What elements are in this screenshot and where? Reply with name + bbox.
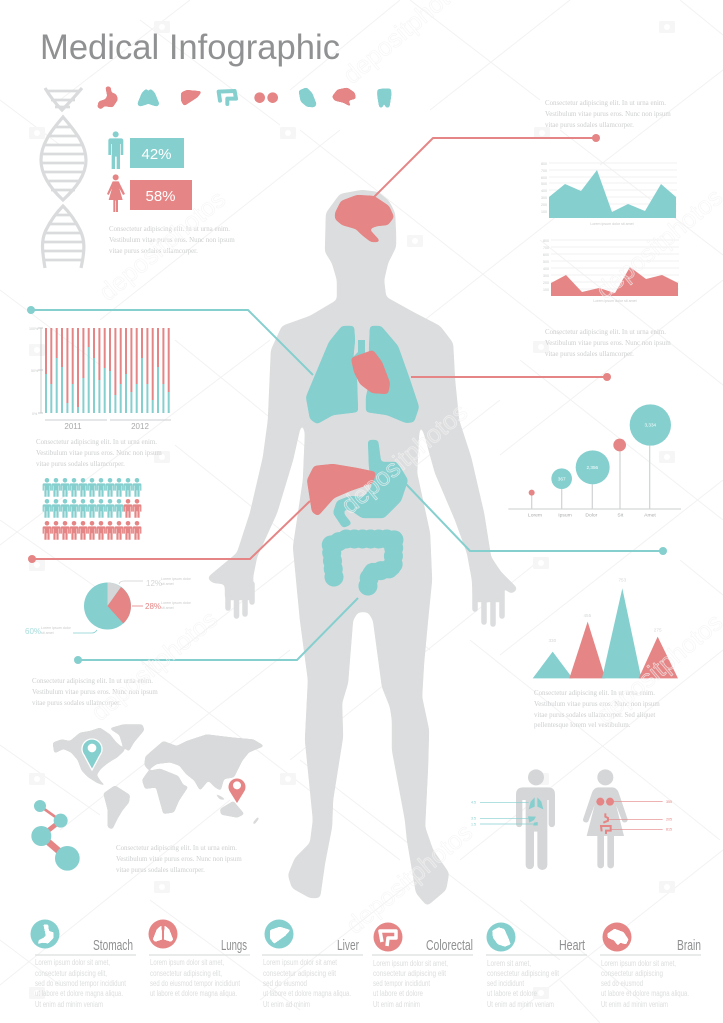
area chart: teal: 800: [541, 162, 547, 166]
leader: stomach: [405, 483, 667, 555]
section: liver: [262, 920, 363, 1009]
copy: colorectal: Ut enim ad minim: [373, 1000, 420, 1009]
copy: lungs: Lorem ipsum dolor sit amet,: [150, 958, 224, 967]
section: lungs: [148, 920, 250, 998]
title: Medical Infographic: [40, 28, 340, 67]
label: heart: Heart: [559, 937, 586, 954]
copy: heart: ut labore et dolore: [487, 989, 537, 998]
watermark text: depositphotos: [336, 398, 473, 520]
pie chart: Lorem ipsum dolor: [161, 577, 192, 581]
icon: colon: [219, 91, 236, 104]
icon: woman: [107, 174, 125, 212]
bubble chart: 367: [558, 476, 566, 481]
pictogram grid of people: [43, 478, 141, 540]
area chart: teal: 300: [541, 196, 547, 200]
copy: lungs: ut labore et dolore magna aliqua.: [150, 989, 237, 998]
label: colorectal: Colorectal: [426, 937, 473, 954]
leader: brain: [373, 134, 600, 198]
text block: top right: vitae purus sodales ullamcorper.: [545, 122, 634, 129]
female anatomy figure: 815: [666, 828, 672, 832]
icon: DNA helix: [41, 88, 86, 268]
bubble chart: Dolor: [585, 513, 598, 519]
copy: liver: sed do eiusmod: [263, 979, 307, 988]
bubble chart: Amet: [644, 513, 656, 519]
area chart: teal: 700: [541, 169, 547, 173]
copy: brain: sed do eiusmod: [601, 979, 643, 988]
icon: heart: [299, 87, 317, 107]
text block: above map: vitae purus sodales ullamcorper.: [32, 700, 121, 707]
copy: brain: Ut enim ad minim veniam: [601, 1000, 668, 1009]
male statistic: 42%: [141, 146, 172, 163]
male anatomy figure: [471, 769, 555, 870]
leader: lungs: [27, 306, 313, 375]
map pin: teal: [82, 739, 102, 770]
pie chart: sit amet: [161, 582, 174, 586]
area chart: red: [543, 239, 679, 303]
icon: heart badge: [486, 922, 516, 952]
copy: liver: consectetur adipiscing elit: [263, 969, 337, 978]
text block: middle right: vitae purus sodales ullamcorper.: [545, 351, 634, 358]
male statistic: [108, 131, 184, 169]
icon: liver: [181, 90, 202, 106]
female statistic: 58%: [145, 188, 176, 205]
area chart: teal: Lorem ipsum dolor sit amet: [590, 222, 634, 226]
pie chart: Lorem ipsum dolor: [161, 601, 192, 605]
organ: stomach: [333, 440, 408, 528]
area chart: red: Lorem ipsum dolor sit amet: [593, 299, 637, 303]
copy: stomach: Ut enim ad minim veniam: [35, 1000, 103, 1009]
triangle chart: [533, 578, 678, 678]
pie chart: Lorem ipsum dolor: [41, 626, 72, 630]
area chart: red: 200: [543, 281, 549, 285]
section: colorectal: [372, 922, 473, 1009]
bubble chart: 2,356: [587, 465, 599, 470]
world map: [53, 724, 264, 829]
copy: stomach: sed do eiusmod tempor incididunt: [35, 979, 127, 988]
icon: stomach badge: [30, 920, 60, 948]
text block: middle right: Vestibulum vitae purus eros. Nunc non ipsum: [545, 340, 671, 347]
bubble chart: Ipsum: [558, 513, 572, 519]
organ: colon: [331, 539, 394, 592]
section: brain: [600, 922, 701, 1009]
icon: brain badge: [602, 922, 632, 952]
icon: brain: [332, 88, 356, 107]
copy: heart: Ut enim ad minim veniam: [487, 1000, 554, 1009]
text block: left middle: Consectetur adipiscing elit. In ut urna enim.: [36, 439, 157, 446]
copy: stomach: ut labore et dolore magna aliqua.: [35, 989, 123, 998]
label: liver: Liver: [337, 937, 359, 954]
area chart: teal: 100: [541, 210, 547, 214]
triangle chart: 275: [654, 627, 662, 632]
icon: colon badge: [374, 922, 402, 952]
bar: 58%: [130, 180, 192, 210]
organ: heart: [351, 350, 390, 394]
male anatomy figure: 3.5: [471, 817, 476, 821]
map pin: red: [228, 778, 246, 804]
copy: heart: consectetur adipiscing elit: [487, 969, 560, 978]
female anatomy figure: 355: [666, 800, 672, 804]
area chart: red: 400: [543, 267, 549, 271]
area chart: teal: 500: [541, 182, 547, 186]
text block: middle right: Consectetur adipiscing elit. In ut urna enim.: [545, 329, 666, 336]
icon: liver badge: [264, 920, 294, 948]
leader: liver: [28, 501, 310, 563]
human body silhouette: [207, 190, 518, 906]
stacked bar chart: 0%: [32, 412, 38, 416]
text block: gender: Consectetur adipiscing elit. In ut urna enim.: [109, 226, 230, 233]
copy: liver: Ut enim ad minim: [263, 1000, 310, 1009]
triangle chart: 330: [548, 638, 557, 643]
text block: above map: Vestibulum vitae purus eros. Nunc non ipsum: [32, 689, 158, 696]
pie chart: 12%: [146, 579, 162, 588]
copy: stomach: Lorem ipsum dolor sit amet,: [35, 958, 110, 967]
male anatomy figure: 4.5: [471, 801, 476, 805]
area chart: teal: 600: [541, 176, 547, 180]
male anatomy figure: 1.5: [471, 822, 476, 826]
text block: left middle: Vestibulum vitae purus eros. Nunc non ipsum: [36, 450, 162, 457]
copy: brain: Lorem ipsum dolor sit amet,: [601, 959, 676, 968]
text block: bottom right: Vestibulum vitae purus eros. Nunc non ipsum: [534, 701, 660, 708]
organ: brain: [335, 195, 394, 242]
section: stomach: [30, 920, 136, 1009]
text block: below map: Consectetur adipiscing elit. In ut urna enim.: [116, 845, 237, 852]
copy: liver: Lorem ipsum dolor sit amet: [263, 958, 338, 967]
female anatomy figure: [583, 769, 672, 868]
text block: gender: Vestibulum vitae purus eros. Nunc non ipsum: [109, 237, 235, 244]
pie chart: 28%: [145, 602, 161, 611]
stacked bar chart: 2012: [131, 422, 149, 431]
text block: top right: Consectetur adipiscing elit. In ut urna enim.: [545, 100, 666, 107]
copy: heart: Lorem sit amet,: [487, 959, 531, 968]
icon row: organs: [97, 87, 391, 109]
copy: stomach: consectetur adipiscing elit,: [35, 969, 107, 978]
bubble chart: Sit: [617, 513, 624, 519]
pie chart: 60%: [25, 627, 41, 636]
leader lines and organs: [27, 134, 667, 664]
stacked bar chart: 50%: [31, 369, 39, 373]
stacked bar chart: 2011: [64, 422, 82, 431]
text block: above map: Consectetur adipiscing elit. In ut urna enim.: [32, 678, 153, 685]
area chart: red: 700: [543, 246, 549, 250]
text block: top right: Vestibulum vitae purus eros. Nunc non ipsum: [545, 111, 671, 118]
leader: colon: [74, 598, 358, 664]
bubble chart: [508, 404, 681, 519]
area chart: teal: 400: [541, 189, 547, 193]
bubble chart: 3,334: [645, 423, 657, 428]
text block: bottom right: vitae purus sodales ullamcorper. Sed aliquet: [534, 712, 655, 719]
pie chart: [25, 577, 192, 636]
text block: gender: vitae purus sodales ullamcorper.: [109, 248, 198, 255]
bubble chart: Lorem: [528, 513, 542, 519]
copy: colorectal: consectetur adipiscing elit: [373, 969, 447, 978]
pie chart: sit amet: [41, 631, 54, 635]
watermark text: depositphotos: [341, 818, 478, 940]
icon: man: [108, 131, 123, 169]
copy: liver: ut labore et dolore magna aliqua.: [263, 989, 351, 998]
icon: tooth: [377, 89, 391, 108]
organ: lungs: [306, 326, 419, 424]
watermark text: depositphotos: [86, 605, 223, 727]
female statistic: [107, 174, 192, 212]
icon: stomach: [97, 87, 118, 109]
bar: 42%: [130, 138, 184, 168]
copy: colorectal: ut labore et dolore: [373, 989, 423, 998]
label: brain: Brain: [677, 937, 701, 954]
triangle chart: 753: [618, 578, 627, 583]
copy: colorectal: sed tempor incididunt: [373, 979, 431, 988]
icon: lungs badge: [148, 920, 178, 948]
label: stomach: Stomach: [93, 937, 133, 954]
stacked bar chart: 100%: [29, 327, 39, 331]
copy: colorectal: Lorem ipsum dolor sit amet,: [373, 959, 448, 968]
pie chart: sit amet: [161, 606, 174, 610]
area chart: teal: 200: [541, 203, 547, 207]
copy: heart: sed incididunt: [487, 979, 525, 988]
stacked bar chart: [29, 327, 171, 431]
text block: below map: Vestibulum vitae purus eros. Nunc non ipsum: [116, 856, 242, 863]
area chart: red: 500: [543, 260, 549, 264]
triangle chart: 455: [583, 613, 592, 618]
copy: brain: ut labore et dolore magna aliqua.: [601, 989, 689, 998]
section: heart: [486, 922, 587, 1009]
watermark text: depositphotos: [94, 185, 231, 307]
area chart: red: 300: [543, 274, 549, 278]
icon: lungs: [137, 88, 159, 107]
organ: liver: [307, 464, 376, 516]
text block: bottom right: pellentesque lorem vel vestibulum.: [534, 722, 631, 729]
area chart: red: 800: [543, 239, 549, 243]
copy: lungs: consectetur adipiscing elit,: [150, 969, 222, 978]
label: lungs: Lungs: [221, 937, 247, 954]
text block: left middle: vitae purus sodales ullamcorper.: [36, 461, 125, 468]
copy: lungs: sed do eiusmod tempor incididunt: [150, 979, 241, 988]
area chart: teal: [541, 162, 677, 226]
copy: brain: consectetur adipiscing: [601, 969, 663, 978]
leader: heart: [411, 373, 611, 381]
icon: kidneys: [254, 92, 278, 103]
text block: bottom right: Consectetur adipiscing elit. In ut urna enim.: [534, 690, 655, 697]
area chart: red: 600: [543, 253, 549, 257]
text block: below map: vitae purus sodales ullamcorper.: [116, 867, 205, 874]
female anatomy figure: 205: [666, 818, 672, 822]
area chart: red: 100: [543, 288, 549, 292]
molecule diagram: [31, 800, 80, 871]
